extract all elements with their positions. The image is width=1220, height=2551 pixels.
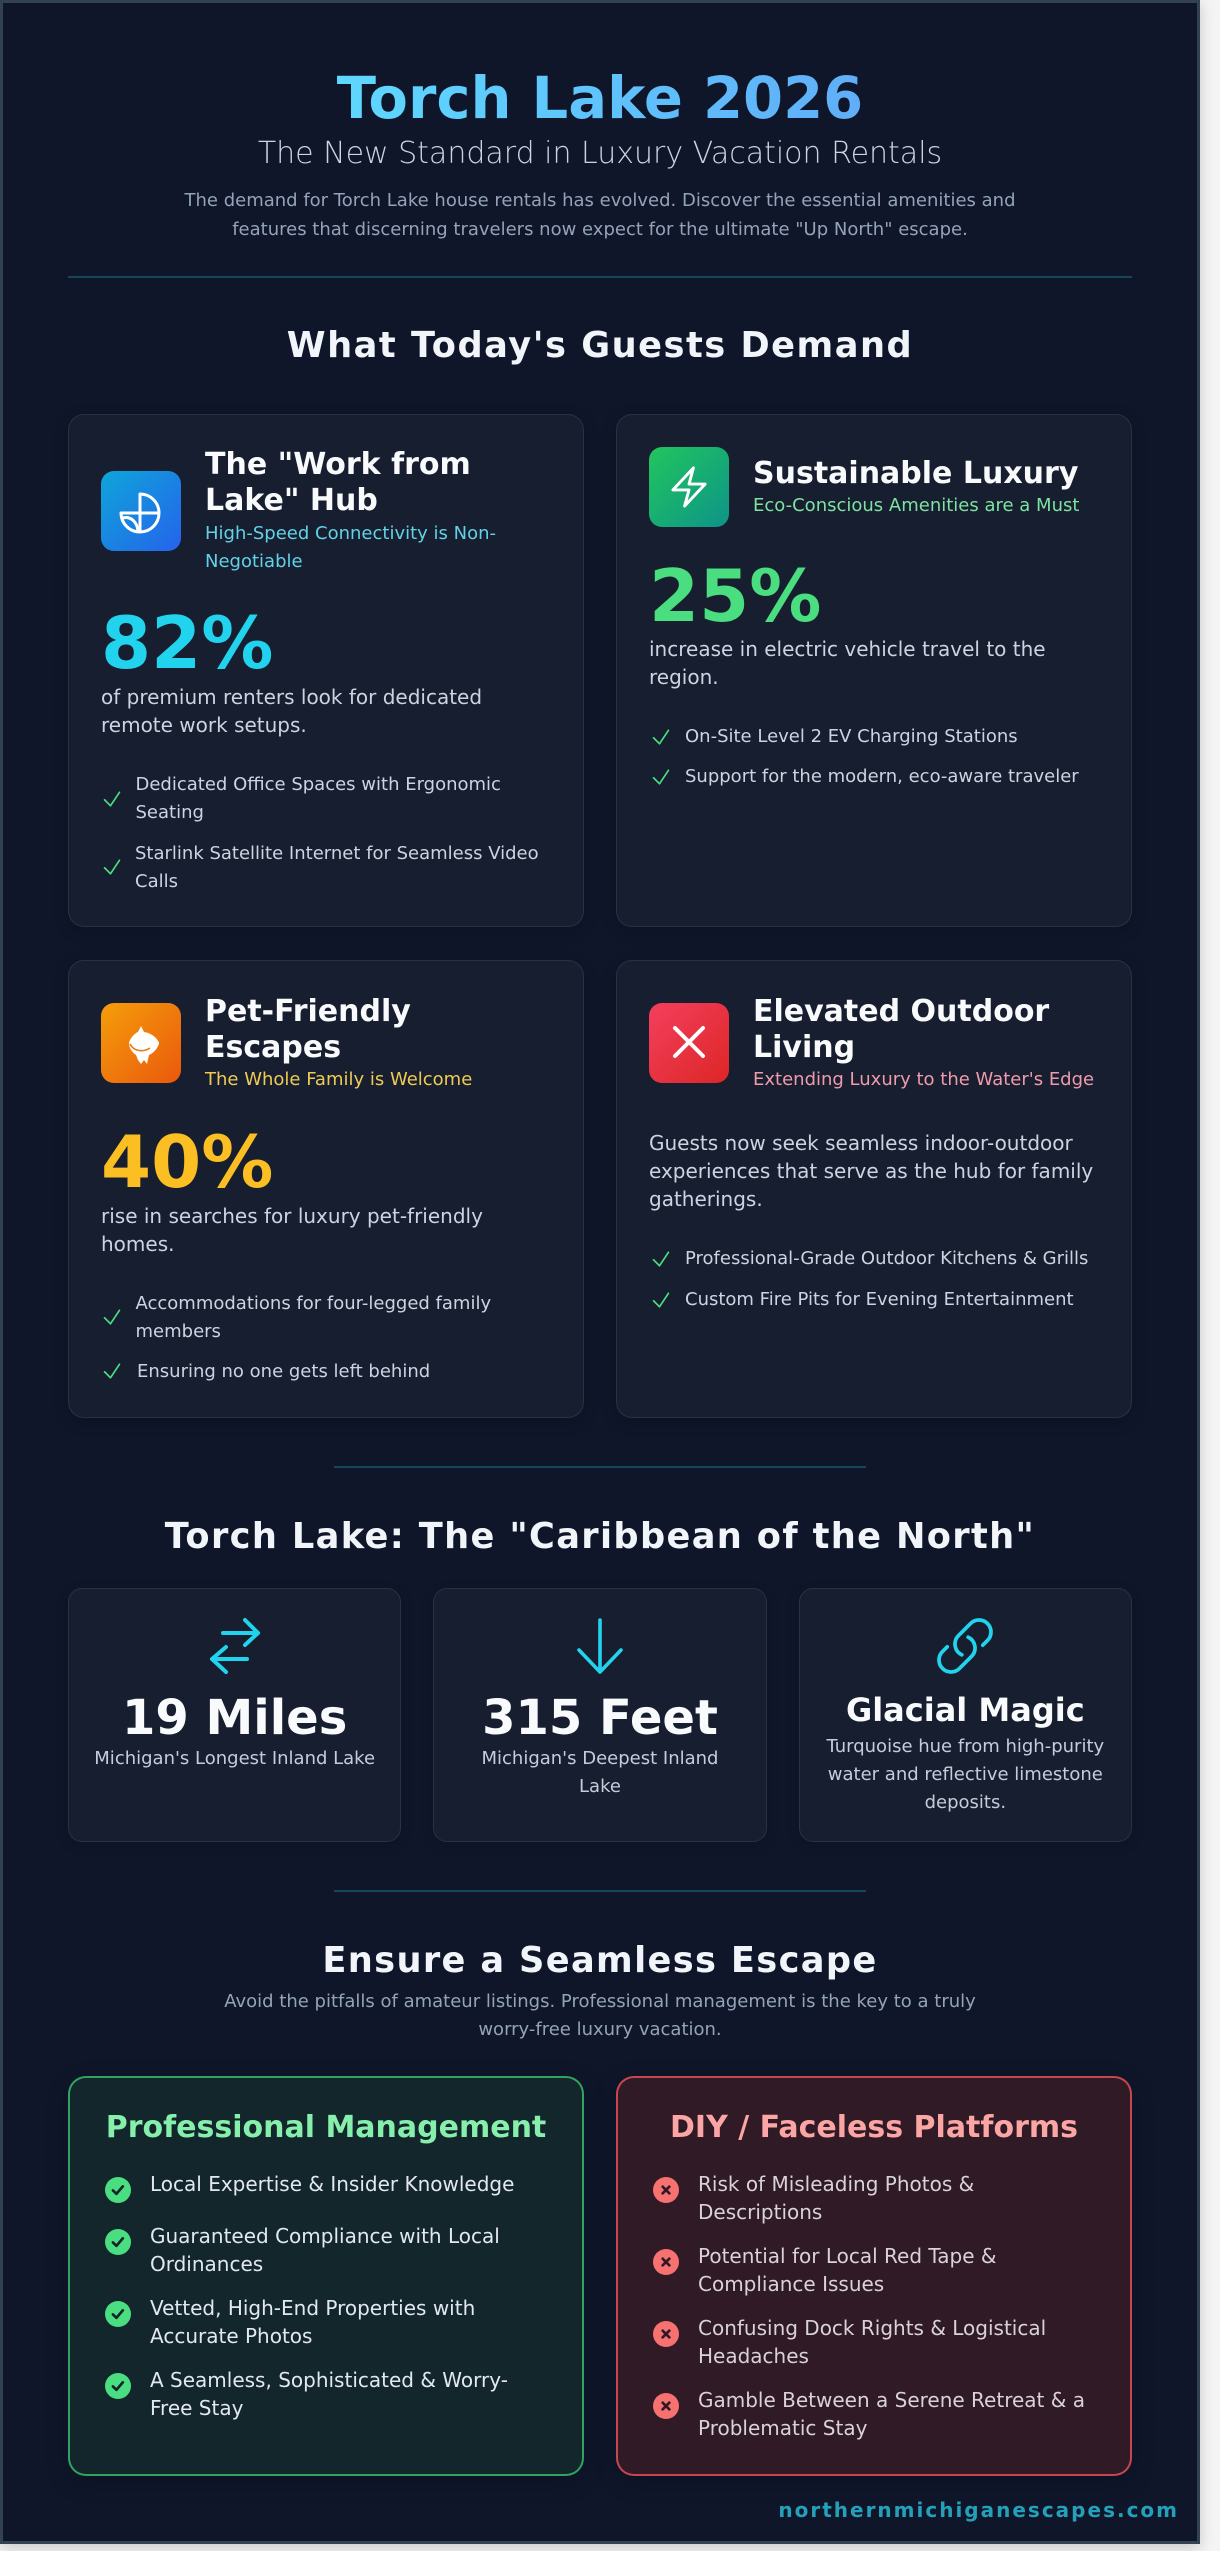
check item 2 bbox=[104, 843, 539, 892]
item: seamless stay: Free Stay bbox=[150, 2396, 243, 2420]
check item 2: Starlink Satellite Internet for Seamless Video bbox=[135, 843, 539, 864]
fact description bbox=[826, 1736, 1104, 1813]
card title: Lake" Hub bbox=[205, 483, 378, 518]
card title: The "Work from bbox=[205, 447, 471, 482]
subtitle: The New Standard in Luxury Vacation Rentals bbox=[258, 136, 942, 171]
card subtitle: Negotiable bbox=[205, 550, 303, 572]
fact title: Glacial Magic bbox=[846, 1691, 1085, 1729]
card subtitle: High-Speed Connectivity is Non- bbox=[205, 523, 496, 544]
check item 2: Ensuring no one gets left behind bbox=[137, 1361, 430, 1382]
stat description: remote work setups. bbox=[101, 713, 307, 737]
item: vetted properties: Vetted, High-End Properties with bbox=[150, 2296, 475, 2320]
item: gamble bbox=[653, 2388, 1085, 2440]
fact card: depth bbox=[433, 1588, 767, 1842]
item: vetted properties bbox=[105, 2296, 475, 2348]
stat description: of premium renters look for dedicated bbox=[101, 685, 482, 709]
item: seamless stay bbox=[105, 2368, 508, 2420]
fact label: Lake bbox=[579, 1776, 621, 1797]
card title: Sustainable Luxury bbox=[753, 456, 1078, 491]
section intro bbox=[224, 1991, 976, 2040]
intro text: The demand for Torch Lake house rentals has evolved. Discover the essential amenities and bbox=[184, 190, 1016, 211]
card title: Pet-Friendly bbox=[205, 994, 411, 1029]
section intro: worry-free luxury vacation. bbox=[478, 2019, 722, 2040]
fact description: deposits. bbox=[925, 1792, 1006, 1813]
panel: diy faceless platforms bbox=[616, 2076, 1132, 2476]
check item 2: Support for the modern, eco-aware traveler bbox=[685, 766, 1079, 787]
fact value: 315 Feet bbox=[482, 1690, 718, 1746]
check item 1: On-Site Level 2 EV Charging Stations bbox=[685, 726, 1018, 747]
footer url: northernmichiganescapes.com bbox=[778, 2498, 1179, 2522]
stat description: region. bbox=[649, 665, 719, 689]
check item 1 bbox=[104, 1293, 491, 1342]
check item 1: members bbox=[136, 1321, 221, 1342]
intro text bbox=[184, 190, 1016, 240]
card title bbox=[205, 994, 411, 1065]
card title: Escapes bbox=[205, 1030, 341, 1065]
item: seamless stay: A Seamless, Sophisticated & Worry- bbox=[150, 2368, 508, 2392]
item: red tape: Compliance Issues bbox=[698, 2272, 884, 2296]
heading: what guests demand: What Today's Guests Demand bbox=[287, 325, 913, 366]
card title bbox=[753, 994, 1050, 1065]
card title: Elevated Outdoor bbox=[753, 994, 1049, 1029]
description: gatherings. bbox=[649, 1187, 763, 1211]
fact description: Turquoise hue from high-purity bbox=[826, 1736, 1104, 1757]
item: misleading photos: Descriptions bbox=[698, 2200, 822, 2224]
icon: connectivity bbox=[101, 471, 181, 551]
stat description bbox=[101, 685, 482, 737]
item: misleading photos: Risk of Misleading Photos & bbox=[698, 2172, 974, 2196]
panel: professional management bbox=[68, 2076, 584, 2476]
description: experiences that serve as the hub for family bbox=[649, 1159, 1093, 1183]
stat: 25%: 25% bbox=[649, 554, 821, 638]
check item 2: Calls bbox=[135, 871, 178, 892]
item: dock rights: Headaches bbox=[698, 2344, 809, 2368]
panel heading: DIY / Faceless Platforms bbox=[670, 2110, 1078, 2145]
panel: sustainable luxury bbox=[616, 414, 1132, 927]
description: Guests now seek seamless indoor-outdoor bbox=[649, 1131, 1073, 1155]
stat description bbox=[649, 637, 1046, 689]
card title: Living bbox=[753, 1030, 855, 1065]
icon: chain link bbox=[937, 1618, 993, 1674]
fact value: 19 Miles bbox=[122, 1690, 347, 1746]
item: compliance bbox=[105, 2224, 500, 2276]
icon: crossed lines bbox=[649, 1003, 729, 1083]
check item 1: Dedicated Office Spaces with Ergonomic bbox=[136, 774, 501, 795]
heading: caribbean of the north: Torch Lake: The "Caribbean of the North" bbox=[165, 1516, 1035, 1557]
check item 1: Seating bbox=[136, 802, 204, 823]
fact label: Michigan's Deepest Inland bbox=[481, 1748, 718, 1769]
fact label bbox=[481, 1748, 718, 1797]
stat description: rise in searches for luxury pet-friendly bbox=[101, 1204, 483, 1228]
item: expertise bbox=[105, 2172, 514, 2203]
section intro: Avoid the pitfalls of amateur listings. Professional management is the key to a truly bbox=[224, 1991, 976, 2012]
item: compliance: Guaranteed Compliance with Local bbox=[150, 2224, 500, 2248]
item: compliance: Ordinances bbox=[150, 2252, 263, 2276]
panel heading: Professional Management bbox=[106, 2110, 546, 2145]
item: dock rights bbox=[653, 2316, 1046, 2368]
panel: pet-friendly escapes bbox=[68, 960, 584, 1418]
check item 1: Professional-Grade Outdoor Kitchens & Grills bbox=[685, 1248, 1088, 1269]
item: gamble: Gamble Between a Serene Retreat & a bbox=[698, 2388, 1085, 2412]
fact card: glacial magic bbox=[799, 1588, 1132, 1842]
stat description: increase in electric vehicle travel to the bbox=[649, 637, 1046, 661]
check item 1 bbox=[104, 774, 501, 823]
item: dock rights: Confusing Dock Rights & Logistical bbox=[698, 2316, 1046, 2340]
icon: down arrow bbox=[577, 1618, 623, 1674]
item: red tape bbox=[653, 2244, 996, 2296]
fact description: water and reflective limestone bbox=[828, 1764, 1103, 1785]
icon: lightning bolt bbox=[649, 447, 729, 527]
panel: work from lake hub bbox=[68, 414, 584, 927]
item: gamble: Problematic Stay bbox=[698, 2416, 867, 2440]
card subtitle: The Whole Family is Welcome bbox=[205, 1069, 472, 1090]
icon: opposing arrows bbox=[210, 1618, 260, 1674]
check item 1: Accommodations for four-legged family bbox=[136, 1293, 491, 1314]
check item 2: Custom Fire Pits for Evening Entertainment bbox=[685, 1289, 1074, 1310]
title: Torch Lake 2026 bbox=[337, 65, 863, 132]
card title bbox=[205, 447, 471, 518]
icon: pet bbox=[101, 1003, 181, 1083]
header bbox=[184, 65, 1016, 240]
stat description bbox=[101, 1204, 483, 1256]
panel: elevated outdoor living bbox=[616, 960, 1132, 1418]
fact card: length bbox=[68, 1588, 401, 1842]
item: expertise: Local Expertise & Insider Knowledge bbox=[150, 2172, 514, 2196]
stat: 40%: 40% bbox=[101, 1120, 273, 1204]
card subtitle: Extending Luxury to the Water's Edge bbox=[753, 1069, 1094, 1090]
item: misleading photos bbox=[653, 2172, 974, 2224]
intro text: features that discerning travelers now expect for the ultimate "Up North" escape. bbox=[232, 219, 968, 240]
stat description: homes. bbox=[101, 1232, 174, 1256]
card subtitle bbox=[205, 523, 496, 572]
fact label: Michigan's Longest Inland Lake bbox=[94, 1748, 375, 1769]
heading: seamless escape: Ensure a Seamless Escape bbox=[322, 1940, 878, 1981]
description bbox=[649, 1131, 1093, 1211]
stat: 82%: 82% bbox=[101, 601, 273, 685]
item: red tape: Potential for Local Red Tape & bbox=[698, 2244, 996, 2268]
card subtitle: Eco-Conscious Amenities are a Must bbox=[753, 495, 1079, 516]
item: vetted properties: Accurate Photos bbox=[150, 2324, 312, 2348]
